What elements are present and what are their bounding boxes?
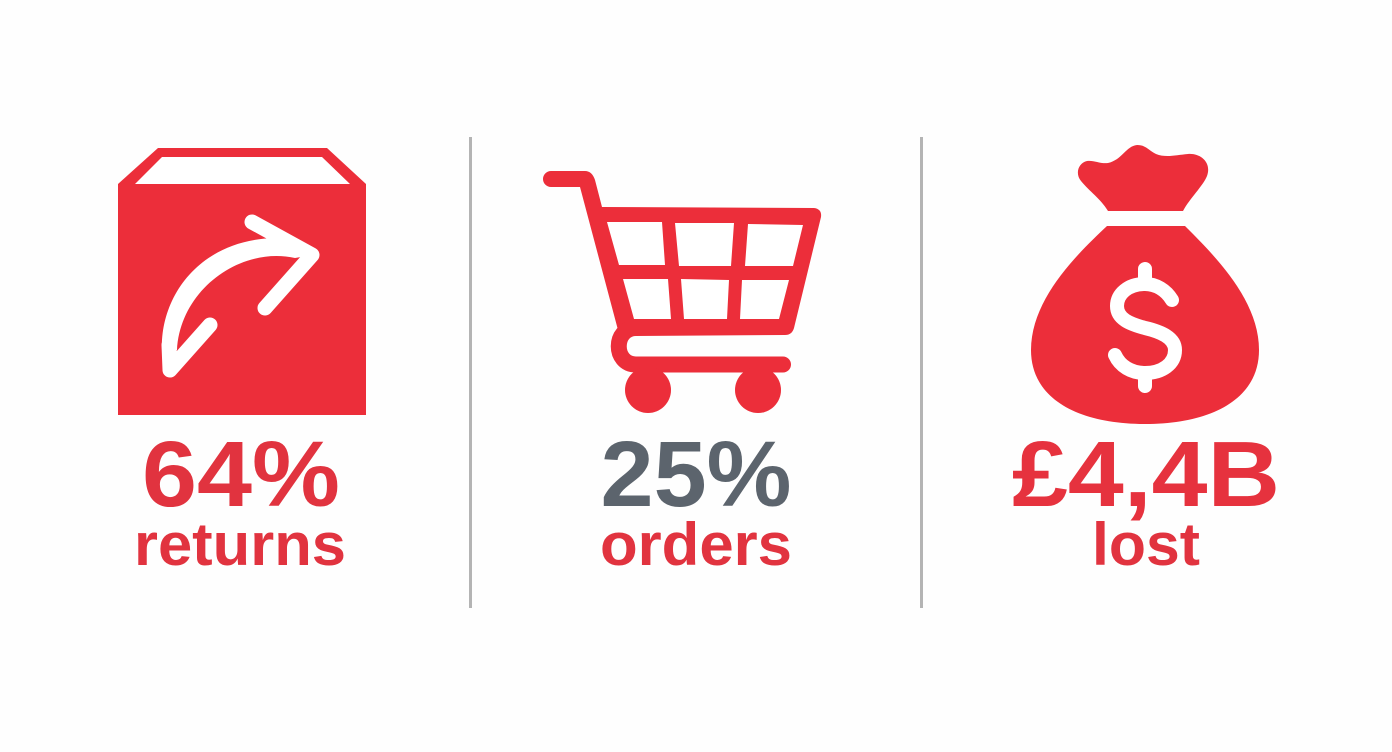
cart wheel: right [735,367,781,413]
stat: 64%: 64% [142,422,340,526]
label: orders: orders [600,511,792,578]
label: returns: returns [134,511,346,578]
icon: return arrow [162,222,313,370]
icon: shopping cart [543,171,821,413]
cart wheel: left [625,367,671,413]
stat: £4,4B: £4,4B [1012,422,1280,526]
icon: dollar sign [1115,269,1175,386]
cart lower bar [619,328,783,364]
label: lost: lost [1092,511,1200,578]
stat: 25%: 25% [600,422,792,526]
icon: money bag [1031,145,1259,424]
icon: return box [118,148,366,415]
